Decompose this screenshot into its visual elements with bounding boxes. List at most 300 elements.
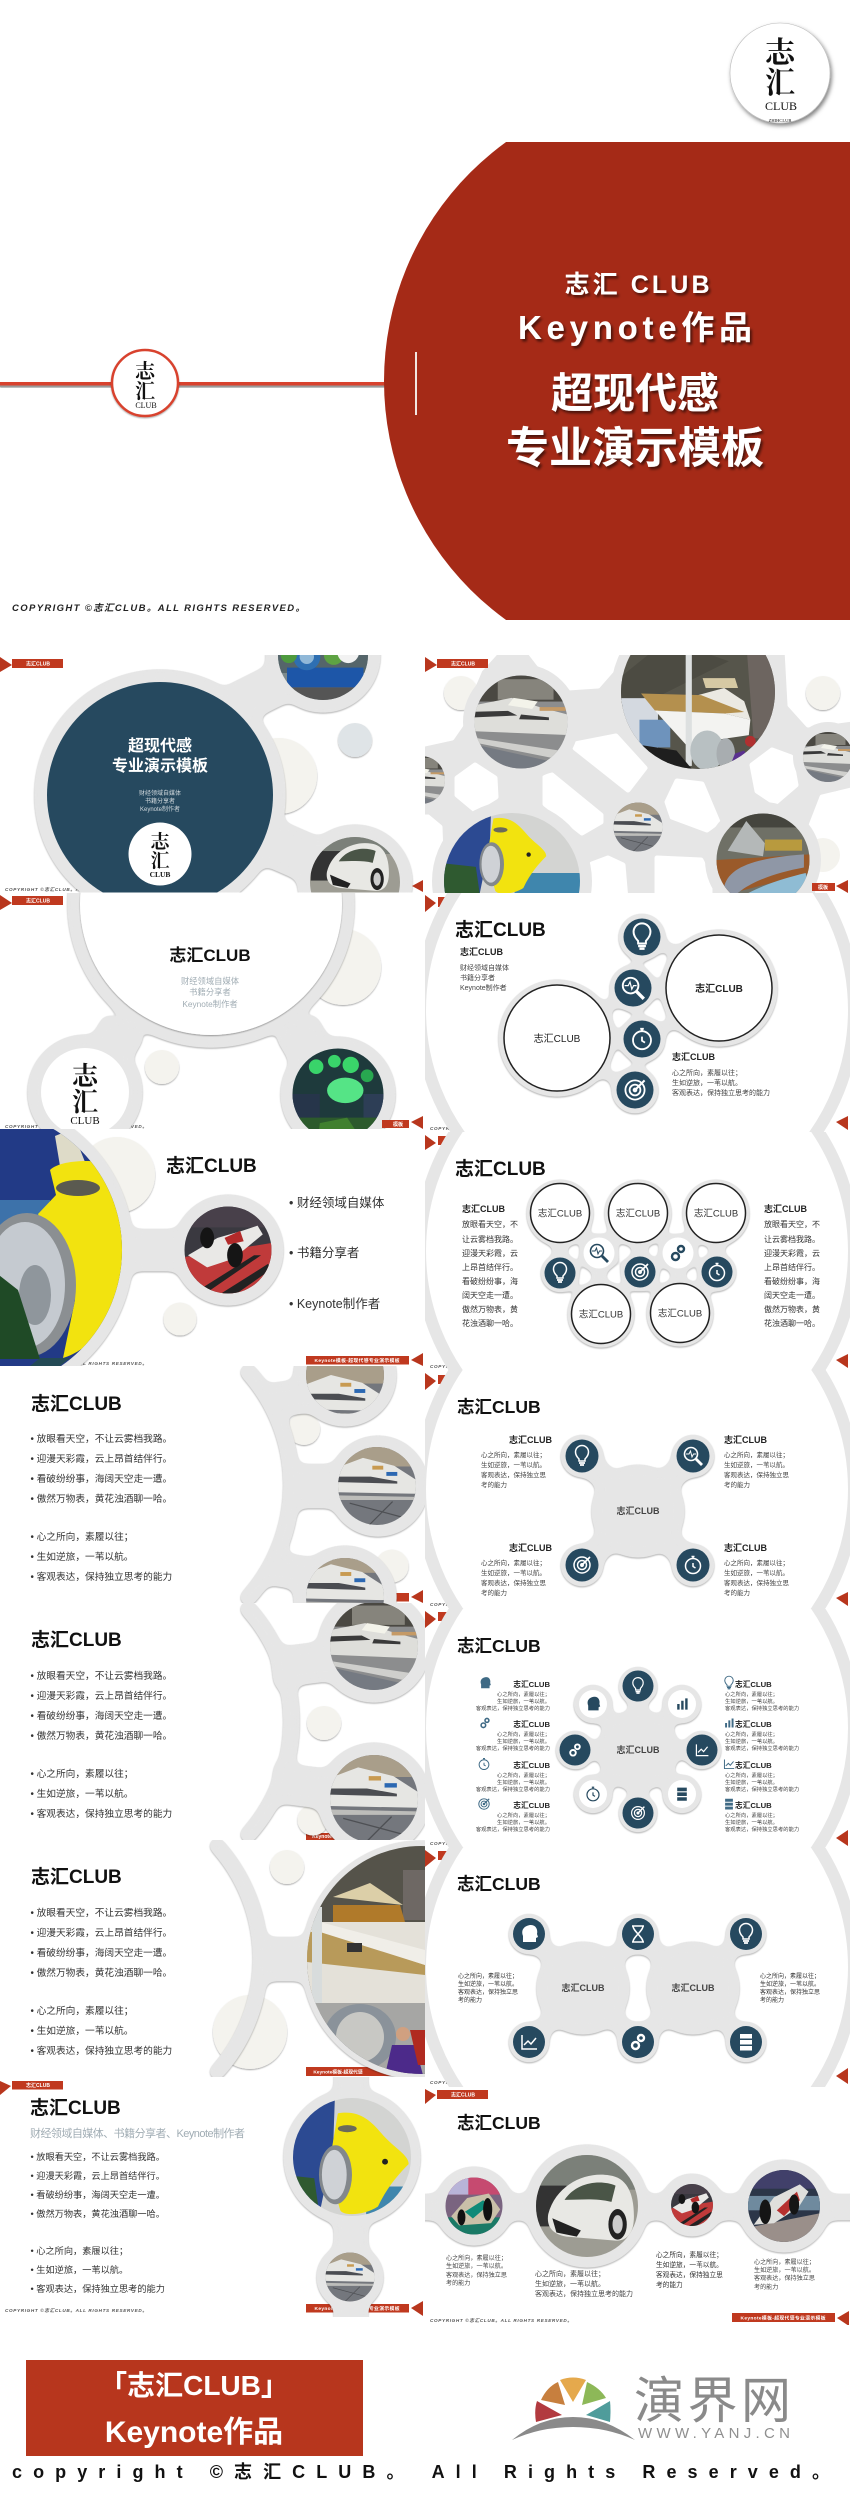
text top right: 心之所向，素履以往； <box>724 1450 789 1459</box>
right list: 生如逆旅，一苇以航。 <box>725 1737 778 1745</box>
hub labels <box>562 1982 715 1993</box>
left list <box>476 1677 550 1833</box>
text top right: 志汇CLUB <box>724 1434 767 1445</box>
bullet list: • 看破纷纷事，海阔天空走一遭。 <box>30 1472 172 1485</box>
grey photo rings <box>432 655 838 893</box>
logo: red ringed seal on line: 汇 <box>135 380 155 403</box>
photo: yellow submarine <box>444 813 580 893</box>
left column text: 志汇CLUB <box>462 1203 505 1214</box>
bottom tag and arrow <box>306 1353 423 1366</box>
pale decorative circles <box>79 1137 196 1336</box>
corner arrow <box>836 1116 848 1130</box>
tag: 志汇CLUB <box>26 2082 50 2089</box>
panel: slide 4 two circles and icons <box>425 893 850 1132</box>
photo: yacht right <box>803 732 850 782</box>
bottom tag <box>306 2067 409 2076</box>
right text: 生如逆旅，一苇以航。 <box>760 1980 820 1988</box>
panel: slide 12 double hub diagram <box>420 1750 850 2184</box>
tag <box>425 1373 452 1390</box>
photo: white concept car <box>465 2084 709 2328</box>
left text: 客观表达，保持独立思 <box>458 1988 518 1996</box>
text bottom left: 客观表达，保持独立思 <box>481 1578 546 1587</box>
copyright: COPYRIGHT ©志汇CLUB。ALL RIGHTS RESERVED。 <box>5 1360 147 1366</box>
left list: 心之所向，素履以往； <box>497 1771 550 1779</box>
circle labels: 志汇CLUB <box>579 1308 623 1320</box>
white icons <box>584 1238 694 1268</box>
bullet list: • 客观表达，保持独立思考的能力 <box>30 1807 172 1820</box>
right list: 志汇CLUB <box>735 1760 772 1770</box>
grey bubbles <box>509 1914 766 2062</box>
photo: red race car <box>671 2184 713 2226</box>
right list: 志汇CLUB <box>735 1800 772 1810</box>
left column text: 傲然万物表，黄 <box>462 1304 518 1314</box>
subtitle lines <box>181 976 240 1009</box>
text bottom left: 心之所向，素履以往； <box>481 1558 546 1567</box>
photo: large yacht close-up <box>300 1840 430 2080</box>
photo: small boat <box>614 802 662 852</box>
bullet list: • 迎漫天彩霞，云上昂首结伴行。 <box>30 1926 172 1939</box>
white ring icons <box>579 1690 696 1808</box>
cover title block: Keynote作品 <box>518 309 752 346</box>
text column b: 心之所向，素履以往； <box>535 2269 605 2278</box>
circle labels: 志汇CLUB <box>616 1208 660 1220</box>
text column c: 考的能力 <box>656 2280 683 2289</box>
right column text: 放眼看天空，不 <box>764 1219 820 1229</box>
photo: yacht upper <box>268 1540 480 1752</box>
cover red circular panel <box>384 142 850 620</box>
bullet list: • 心之所向，素履以往； <box>30 2245 128 2256</box>
right list <box>724 1676 799 1833</box>
text column d: 考的能力 <box>754 2283 778 2291</box>
panel: slide 10 eight-way diagram <box>420 1511 850 1945</box>
right column text: 看破纷纷事，海 <box>764 1276 820 1286</box>
navy icons <box>513 1918 762 2058</box>
photo: white concept car <box>310 837 400 892</box>
grey bubbles <box>284 2060 420 2330</box>
heading: 志汇CLUB <box>169 946 251 965</box>
right text: 客观表达，保持独立思 <box>760 1988 820 1996</box>
bullet list: • 看破纷纷事，海阔天空走一遭。 <box>30 1709 172 1722</box>
bottom tag and arrow <box>395 1590 423 1603</box>
text column d: 生如逆旅，一苇以航。 <box>754 2266 815 2274</box>
panel: slide 1 navy circle <box>0 655 423 892</box>
bottom tag and arrow <box>812 880 848 893</box>
panel: slide 14 car timeline <box>415 2084 850 2328</box>
text column b: 生如逆旅，一苇以航。 <box>535 2279 605 2288</box>
bullet list: • 迎漫天彩霞，云上昂首结伴行。 <box>30 2170 165 2181</box>
slide tag <box>0 657 63 672</box>
cover title block: 专业演示模板 <box>506 425 764 473</box>
navy icons <box>544 1256 732 1288</box>
left list: 客观表达，保持独立思考的能力 <box>476 1744 550 1752</box>
big ring <box>420 1034 850 1468</box>
photo: large yacht on stand <box>621 655 775 769</box>
left list: 客观表达，保持独立思考的能力 <box>476 1825 550 1833</box>
cover title block <box>506 271 764 473</box>
pale decorative circles <box>444 676 840 872</box>
title: 志汇CLUB <box>31 1629 122 1651</box>
tag <box>425 1611 452 1628</box>
left column text: 迎漫天彩霞，云 <box>462 1248 518 1258</box>
left list: 志汇CLUB <box>513 1800 550 1810</box>
pale decorative circles <box>272 723 373 816</box>
text column d <box>754 2258 815 2291</box>
right list: 心之所向，素履以往； <box>725 1690 778 1698</box>
grey connected bubbles <box>26 893 396 1129</box>
right text <box>760 1972 820 2004</box>
corner arrow <box>836 1354 848 1368</box>
white circles <box>530 1184 746 1344</box>
panel: slide 7 text and three yachts <box>30 1309 471 1686</box>
logo: top right seal: CLUB <box>765 99 797 113</box>
subtitle: 财经领域自媒体、书籍分享者、Keynote制作者 <box>30 2126 245 2140</box>
copyright: COPYRIGHT ©志汇CLUB。ALL RIGHTS RESERVED。 <box>430 1125 572 1131</box>
bullet list: • 心之所向，素履以往； <box>30 1767 133 1780</box>
panel: slide 9 text and two yachts <box>30 1540 480 1905</box>
tag <box>425 1850 452 1867</box>
copyright: COPYRIGHT ©志汇CLUB。ALL RIGHTS RESERVED。 <box>430 1363 572 1369</box>
description <box>460 963 509 992</box>
left list: 志汇CLUB <box>513 1679 550 1689</box>
bullet list: • 生如逆旅，一苇以航。 <box>30 1787 133 1800</box>
logo: red ringed seal on line: 志 <box>135 360 157 383</box>
left text: 考的能力 <box>458 1996 482 2004</box>
grey lattice <box>425 655 850 893</box>
text column a <box>446 2254 507 2287</box>
text column a: 考的能力 <box>446 2279 470 2287</box>
tag: 志汇CLUB <box>451 2092 475 2098</box>
pale decorative circles <box>288 1413 408 1582</box>
center label: 志汇CLUB <box>616 1505 660 1516</box>
left column text: 阔天空走一遭。 <box>462 1290 518 1300</box>
text column a: 客观表达，保持独立思 <box>446 2271 507 2279</box>
text bottom right: 志汇CLUB <box>724 1542 767 1553</box>
text top left: 客观表达，保持独立思 <box>481 1470 546 1479</box>
text top right <box>724 1434 790 1489</box>
left list: 生如逆旅，一苇以航。 <box>497 1818 550 1826</box>
text block: 客观表达，保持独立思考的能力 <box>672 1088 770 1097</box>
pale decorative circles <box>298 1706 341 1836</box>
bottom tag and arrow <box>306 2301 423 2316</box>
text top left <box>481 1434 552 1489</box>
center label: 志汇CLUB <box>616 1744 660 1755</box>
text bottom right: 考的能力 <box>724 1588 750 1597</box>
bullet list <box>30 2151 165 2294</box>
copyright: COPYRIGHT ©志汇CLUB。ALL RIGHTS RESERVED。 <box>430 1840 572 1846</box>
seal logo <box>41 1048 129 1136</box>
left list: 心之所向，素履以往； <box>497 1811 550 1819</box>
text block <box>672 1051 770 1097</box>
title: 志汇CLUB <box>31 1866 122 1888</box>
footer red banner: 「志汇CLUB」 <box>99 2370 289 2401</box>
footer red banner <box>26 2360 363 2456</box>
left list: 志汇CLUB <box>513 1760 550 1770</box>
photo: formula car green <box>446 2178 502 2234</box>
left list: 志汇CLUB <box>513 1719 550 1729</box>
copyright: COPYRIGHT ©志汇CLUB。ALL RIGHTS RESERVED。 <box>430 1601 572 1607</box>
navy circle title: 超现代感 <box>128 736 192 755</box>
right list: 生如逆旅，一苇以航。 <box>725 1778 778 1786</box>
right list: 客观表达，保持独立思考的能力 <box>725 1825 799 1833</box>
bullet list <box>30 1669 172 1820</box>
text bottom right: 客观表达，保持独立思 <box>724 1578 790 1587</box>
bullet list: • 客观表达，保持独立思考的能力 <box>30 2044 172 2057</box>
grey bubbles <box>556 1667 721 1832</box>
copyright: COPYRIGHT ©志汇CLUB。ALL RIGHTS RESERVED。 <box>5 2307 147 2313</box>
text column d: 客观表达，保持独立思 <box>754 2274 815 2282</box>
subtitle lines: Keynote制作者 <box>182 999 238 1009</box>
cover title block: 超现代感 <box>551 370 719 417</box>
panel: slide 6 five circles <box>420 1034 850 1468</box>
right column text <box>764 1203 820 1328</box>
text bottom left <box>481 1542 552 1597</box>
text top left: 考的能力 <box>481 1480 507 1489</box>
pale decorative circles <box>145 929 381 1084</box>
navy circle title <box>112 736 208 775</box>
logo: red ringed seal on line <box>112 350 178 416</box>
title: 志汇CLUB <box>31 1393 122 1415</box>
bullet list: • 傲然万物表，黄花浊酒聊一哈。 <box>30 1729 172 1742</box>
white seal logo: 汇 <box>150 850 170 872</box>
left list: 心之所向，素履以往； <box>497 1730 550 1738</box>
bullet list: • 看破纷纷事，海阔天空走一遭。 <box>30 1946 172 1959</box>
icon: target <box>616 1072 654 1108</box>
bullet list: • 生如逆旅，一苇以航。 <box>30 2264 128 2275</box>
white seal logo: CLUB <box>150 870 170 879</box>
navy circle <box>47 682 273 908</box>
photo: green hall <box>292 1048 384 1129</box>
bullet list: • 迎漫天彩霞，云上昂首结伴行。 <box>30 1452 172 1465</box>
photo: yacht left <box>425 756 445 804</box>
bullet list: • 书籍分享者 <box>289 1245 359 1260</box>
white seal logo: 志 <box>150 831 171 853</box>
title: 志汇CLUB <box>457 1874 541 1894</box>
slide tag: 志汇CLUB <box>451 660 475 668</box>
photo: formula E car <box>748 2170 820 2242</box>
bullet list: • 放眼看天空，不让云雾档我路。 <box>30 2151 165 2162</box>
white seal logo <box>128 822 192 886</box>
grey connected bubbles <box>34 655 414 892</box>
right list: 生如逆旅，一苇以航。 <box>725 1697 778 1705</box>
circle labels <box>538 1208 738 1320</box>
corner arrow <box>836 1830 848 1846</box>
text column c: 心之所向，素履以往； <box>656 2250 723 2259</box>
subtitle lines: 书籍分享者 <box>189 987 231 997</box>
text column a: 生如逆旅，一苇以航。 <box>446 2262 507 2270</box>
text bottom right <box>724 1542 790 1597</box>
text column c <box>656 2250 723 2289</box>
photo: small yacht <box>291 2218 409 2336</box>
grey bubbles <box>561 1435 714 1586</box>
seal logo: CLUB <box>70 1115 100 1127</box>
left list: 客观表达，保持独立思考的能力 <box>476 1704 550 1712</box>
text column b <box>535 2269 633 2298</box>
cover red line with logo connector <box>0 382 385 387</box>
tag <box>425 1135 452 1150</box>
logo: yanj website <box>512 2373 791 2442</box>
text block: 志汇CLUB <box>672 1051 715 1062</box>
hub labels: 志汇CLUB <box>672 1982 715 1993</box>
slide 1 copyright: COPYRIGHT ©志汇CLUB。ALL RIGHTS RESERVED。 <box>5 886 147 892</box>
navy circle subtitle <box>139 789 181 813</box>
photo: yellow submarine large <box>0 1100 130 1400</box>
navy circle subtitle: Keynote制作者 <box>140 805 180 813</box>
title: 志汇CLUB <box>166 1155 257 1177</box>
right text: 考的能力 <box>760 1996 784 2004</box>
photo: yacht top <box>251 1309 439 1497</box>
white circle left <box>504 985 610 1091</box>
photo: race car <box>184 1206 272 1294</box>
right column text: 上昂首结伴行。 <box>764 1262 820 1272</box>
left text <box>458 1972 518 2004</box>
big white circle <box>79 893 343 1037</box>
grey bubbles and arc <box>243 1590 430 1855</box>
grey wavy band <box>415 2145 850 2267</box>
seal logo: 汇 <box>72 1088 98 1117</box>
text bottom right: 心之所向，素履以往； <box>724 1558 789 1567</box>
corner arrow <box>412 880 423 892</box>
slide tag <box>425 657 488 672</box>
right list: 生如逆旅，一苇以航。 <box>725 1818 778 1826</box>
bullet list: • 傲然万物表，黄花浊酒聊一哈。 <box>30 1966 172 1979</box>
text block: 心之所向，素履以往； <box>672 1068 742 1077</box>
right list: 志汇CLUB <box>735 1679 772 1689</box>
logo url: WWW.YANJ.CN <box>638 2425 790 2442</box>
left text: 心之所向，素履以往； <box>458 1972 518 1980</box>
photo: silver boat <box>716 814 810 893</box>
text top right: 考的能力 <box>724 1480 750 1489</box>
tag <box>0 2081 63 2095</box>
right list: 客观表达，保持独立思考的能力 <box>725 1785 799 1793</box>
logo: top right seal: 汇 <box>765 67 795 100</box>
ring icons <box>560 1670 718 1828</box>
tag <box>425 2089 488 2104</box>
right column text: 花浊酒聊一哈。 <box>764 1318 820 1328</box>
title: 志汇CLUB <box>457 1397 541 1417</box>
bullet list <box>289 1196 385 1311</box>
white circle left: 志汇CLUB <box>534 1032 581 1045</box>
bottom tag: Keynote <box>312 1834 332 1840</box>
bottom tag and arrow: 模板 <box>393 1121 403 1128</box>
text bottom right: 生如逆旅，一苇以航。 <box>724 1568 789 1577</box>
grey bubbles <box>499 914 777 1113</box>
bullet list: • 客观表达，保持独立思考的能力 <box>30 1570 172 1583</box>
panel: slide 8 four-way diagram <box>420 1272 850 1706</box>
pale decorative circles <box>213 1850 304 2069</box>
white circle right <box>666 935 772 1041</box>
left text: 生如逆旅，一苇以航。 <box>458 1980 518 1988</box>
left list: 生如逆旅，一苇以航。 <box>497 1737 550 1745</box>
bullet list: • Keynote制作者 <box>289 1297 380 1311</box>
text bottom left: 生如逆旅，一苇以航。 <box>481 1568 546 1577</box>
right column text: 阔天空走一遭。 <box>764 1290 820 1300</box>
bottom tag and arrow: Keynote模板-超现代感专业演示模板 <box>740 2314 826 2322</box>
grey bubbles <box>0 1098 283 1402</box>
hub labels: 志汇CLUB <box>562 1982 605 1993</box>
left column text: 花浊酒聊一哈。 <box>462 1318 518 1328</box>
big ring <box>420 793 850 1227</box>
photo: yacht lower <box>268 1693 480 1905</box>
title: 志汇CLUB <box>455 919 546 941</box>
footer copyright line: copyright ©志汇CLUB。 All Rights Reserved。 <box>12 2462 830 2482</box>
panel: slide 13 subtitle and submarine <box>0 1980 529 2336</box>
logo: top right seal: ZHIHCLUB <box>769 118 791 123</box>
panel: slide 2 photo lattice <box>425 655 850 893</box>
right column text: 傲然万物表，黄 <box>764 1304 820 1314</box>
logo fan wedges <box>512 2378 635 2440</box>
icon: magnifier <box>614 970 652 1006</box>
white gaps in lattice <box>420 650 850 900</box>
slide tag <box>0 895 63 910</box>
big ring <box>420 1511 850 1945</box>
text column c: 客观表达，保持独立思 <box>656 2270 723 2279</box>
panel: slide 11 text and large yacht <box>30 1840 540 2080</box>
cover title block: 志汇 CLUB <box>564 271 710 299</box>
bullet list <box>30 1432 172 1583</box>
title: 志汇CLUB <box>30 2097 121 2119</box>
text top left: 生如逆旅，一苇以航。 <box>481 1460 546 1469</box>
text top right: 客观表达，保持独立思 <box>724 1470 790 1479</box>
panel: slide 3 big white circle <box>0 893 423 1129</box>
logo: red ringed seal on line: CLUB <box>135 401 157 410</box>
slide tag: 志汇CLUB <box>26 660 50 668</box>
text bottom left: 考的能力 <box>481 1588 507 1597</box>
bullet list: • 傲然万物表，黄花浊酒聊一哈。 <box>30 2208 165 2219</box>
left column text: 放眼看天空，不 <box>462 1219 518 1229</box>
right column text: 让云雾档我路。 <box>764 1234 820 1244</box>
left list: 心之所向，素履以往； <box>497 1690 550 1698</box>
bullet list: • 生如逆旅，一苇以航。 <box>30 1550 133 1563</box>
logo: top right seal <box>730 23 830 123</box>
navy icons <box>566 1440 710 1582</box>
bottom tag and arrow <box>732 2311 849 2326</box>
bottom tag and arrow: 模板 <box>818 884 828 891</box>
bullet list: • 生如逆旅，一苇以航。 <box>30 2024 133 2037</box>
left column text: 让云雾档我路。 <box>462 1234 518 1244</box>
slide tag <box>425 895 454 912</box>
description: Keynote制作者 <box>460 983 507 992</box>
big ring <box>420 1272 850 1706</box>
bottom tag and arrow: Keynote模板-超现代感专业演示模板 <box>314 1357 400 1364</box>
photo: yacht middle <box>283 1392 471 1580</box>
slide 3 copyright: COPYRIGHT ©志汇CLUB。ALL RIGHTS RESERVED。 <box>5 1123 147 1129</box>
navy circle subtitle: 书籍分享者 <box>145 797 175 805</box>
description: 书籍分享者 <box>460 973 495 982</box>
seal logo: 志 <box>72 1062 100 1091</box>
grey bubbles and arc <box>243 1324 428 1648</box>
navy circle subtitle: 财经领域自媒体 <box>139 789 181 797</box>
description: 财经领域自媒体 <box>460 963 509 972</box>
copyright: COPYRIGHT ©志汇CLUB。ALL RIGHTS RESERVED。 <box>430 2317 572 2323</box>
photo: yellow submarine <box>175 1980 529 2334</box>
right list: 客观表达，保持独立思考的能力 <box>725 1744 799 1752</box>
text top right: 生如逆旅，一苇以航。 <box>724 1460 789 1469</box>
text top left: 志汇CLUB <box>509 1434 552 1445</box>
text column b: 客观表达，保持独立思考的能力 <box>535 2289 633 2298</box>
corner arrow <box>836 2068 848 2084</box>
circle labels: 志汇CLUB <box>538 1208 582 1220</box>
text block: 生如逆旅，一苇以航。 <box>672 1078 742 1087</box>
photo: yacht bottom <box>251 1499 439 1686</box>
bullet list <box>30 1906 172 2057</box>
icon: bulb <box>624 918 660 956</box>
subtitle lines: 财经领域自媒体 <box>181 976 240 986</box>
cover copyright: COPYRIGHT ©志汇CLUB。ALL RIGHTS RESERVED。 <box>12 602 305 614</box>
bullet list: • 放眼看天空，不让云雾档我路。 <box>30 1906 172 1919</box>
text column d: 心之所向，素履以往； <box>754 2258 815 2266</box>
right list: 心之所向，素履以往； <box>725 1730 778 1738</box>
right list: 客观表达，保持独立思考的能力 <box>725 1704 799 1712</box>
